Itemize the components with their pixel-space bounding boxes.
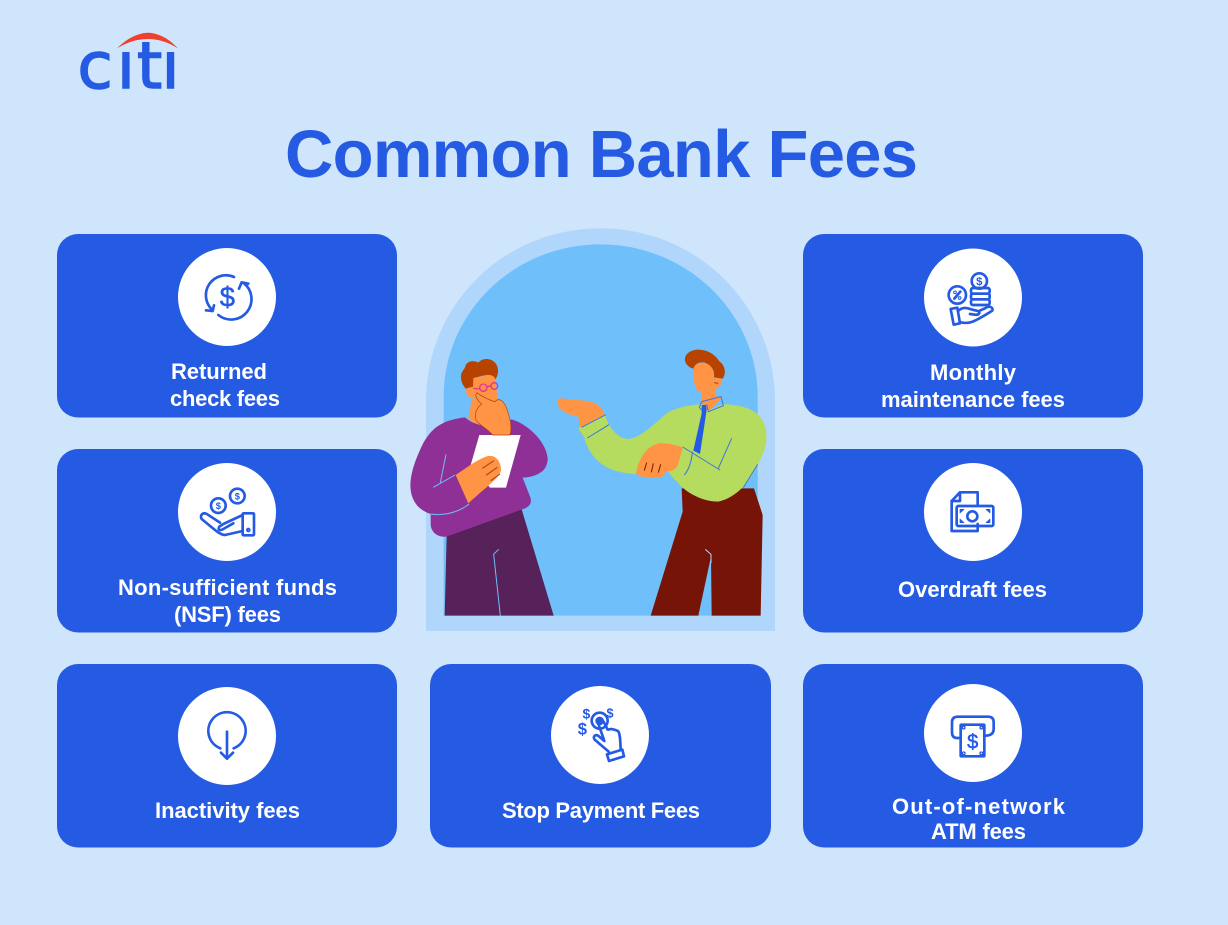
icon: hand with coin stack and percent bbox=[949, 273, 993, 325]
label: (NSF) fees bbox=[174, 602, 281, 627]
illustration: two people talking in an arch bbox=[410, 228, 775, 631]
icon: document and banknote bbox=[952, 492, 993, 531]
label: Non-sufficient funds bbox=[118, 575, 337, 600]
panel: overdraft fees bbox=[803, 449, 1143, 632]
label bbox=[118, 575, 337, 627]
icon: circular dollar arrows bbox=[206, 275, 252, 320]
label: Overdraft fees bbox=[898, 577, 1047, 602]
panel: inactivity fees bbox=[57, 664, 397, 848]
panel: monthly maintenance fees bbox=[803, 234, 1143, 418]
label: Monthly bbox=[930, 360, 1017, 385]
panel: stop payment fees bbox=[430, 664, 771, 848]
panel: out-of-network atm fees bbox=[803, 664, 1143, 848]
icon: circular dollar arrows: $ bbox=[220, 282, 235, 313]
label: Returned bbox=[171, 359, 267, 384]
label bbox=[892, 794, 1066, 844]
label: maintenance fees bbox=[881, 387, 1065, 412]
icon: finger pressing button with dollars: $ bbox=[582, 705, 590, 721]
icon: finger pressing button with dollars: $ bbox=[606, 707, 614, 721]
person: man with tablet bbox=[410, 359, 554, 616]
icon: finger pressing button with dollars bbox=[578, 705, 624, 761]
panel: non-sufficient funds fees bbox=[57, 449, 397, 632]
label: Out-of-network bbox=[892, 794, 1066, 819]
icon: hand with coins: $ bbox=[216, 501, 222, 511]
person: man in green shirt bbox=[557, 350, 766, 616]
label: ATM fees bbox=[931, 819, 1026, 844]
icon: finger pressing button with dollars: $ bbox=[578, 719, 588, 738]
panel: returned check fees bbox=[57, 234, 397, 418]
label: Stop Payment Fees bbox=[502, 798, 700, 823]
title: Common Bank Fees bbox=[285, 117, 918, 192]
icon: hand with coin stack and percent: $ bbox=[976, 276, 983, 288]
logo: citi: citi bbox=[78, 30, 179, 104]
icon: hand with coins: $ bbox=[235, 491, 241, 501]
icon: inactivity down arrow bbox=[208, 712, 246, 759]
arch window bbox=[426, 228, 775, 631]
label: check fees bbox=[170, 386, 280, 411]
icon: atm dispensing cash bbox=[952, 717, 994, 756]
label bbox=[881, 360, 1065, 412]
label: Inactivity fees bbox=[155, 798, 300, 823]
icon: hand with coins bbox=[201, 489, 254, 535]
label bbox=[170, 359, 280, 411]
icon: atm dispensing cash: $ bbox=[967, 731, 978, 753]
